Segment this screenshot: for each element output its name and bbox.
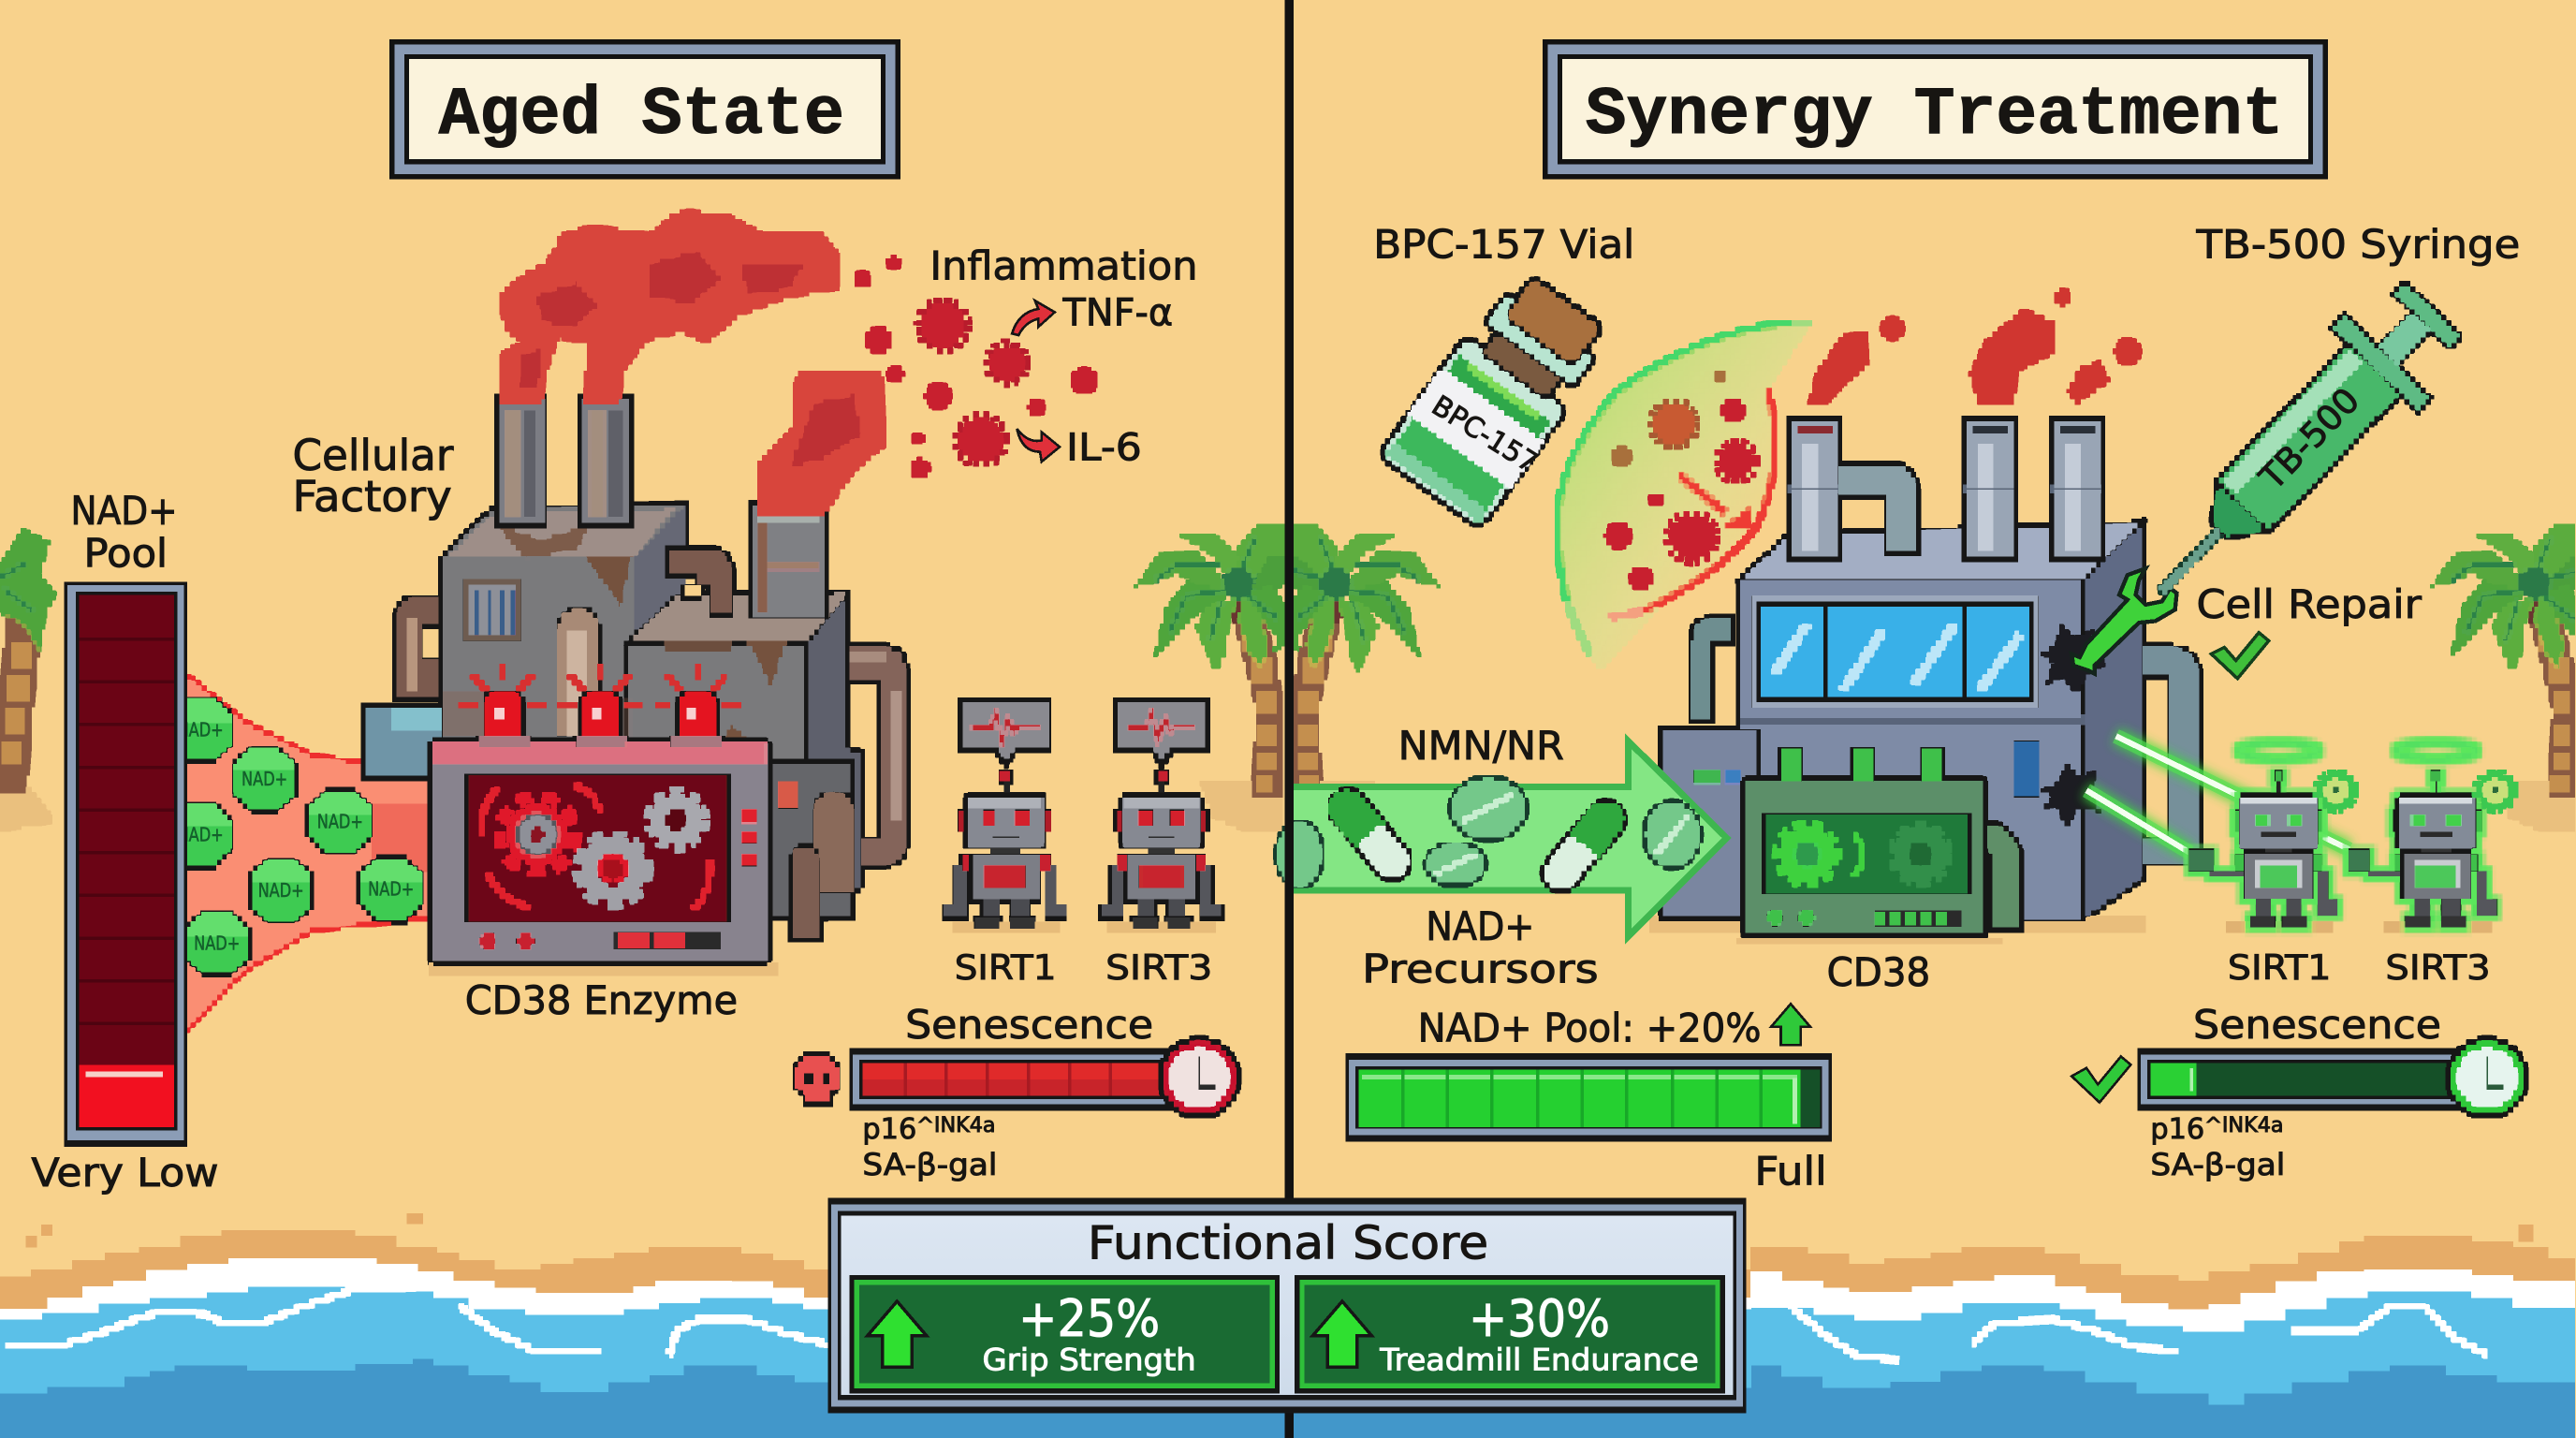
label: Cellular Factory [292, 431, 454, 521]
label: NAD+ Pool: Pool [84, 530, 168, 576]
label: Cellular Factory: Cellular [292, 431, 454, 480]
syringe: TB-500: TB-500 [2251, 380, 2367, 498]
label: Cell Repair: Cell Repair [2197, 581, 2422, 627]
factory chimneys and pipes [1789, 419, 2101, 559]
label: Senescence: Senescence [905, 1002, 1153, 1048]
label: Cellular Factory: Factory [292, 472, 452, 521]
icon: repair check mark [2211, 633, 2269, 679]
panel: aged state [31, 211, 1240, 1196]
label: NAD+ Pool +20%: NAD+ Pool: +20% [1418, 1005, 1761, 1051]
icon: green wrench [2071, 568, 2176, 674]
label: SIRT1: SIRT1 [2228, 947, 2331, 988]
label: NMN/NR: NMN/NR [1398, 723, 1564, 769]
palm tree: far left [0, 529, 56, 831]
markers: p16 and SA-beta-gal [2150, 1113, 2285, 1182]
senescence gauge: low [2137, 1049, 2466, 1110]
card: treadmill endurance [1295, 1275, 1725, 1393]
label: Senescence: Senescence [2193, 1002, 2441, 1048]
SIRT1 robot with weak signal [944, 701, 1066, 933]
icon: up arrow [1771, 1004, 1810, 1045]
icon: clock red [1158, 1036, 1240, 1119]
cytokine particles [855, 257, 1097, 478]
tablets and capsules [1277, 777, 1701, 898]
NAD+ funnel with molecules: NAD+ [242, 768, 287, 790]
arrow to TNF-alpha [1012, 301, 1055, 335]
icon: skull [795, 1055, 840, 1104]
label: NAD+ Precursors: NAD+ [1426, 903, 1534, 949]
arrow to IL-6 [1017, 429, 1060, 462]
palm tree: right panel left [1253, 526, 1439, 829]
label: SIRT3: SIRT3 [1105, 947, 1212, 988]
gears [481, 785, 710, 909]
markers: p16 and SA-beta-gal [862, 1113, 997, 1182]
label: NAD+ Precursors [1362, 903, 1599, 992]
NAD+ pool gauge: very low [65, 581, 187, 1147]
label: TNF-alpha: TNF-α [1062, 290, 1173, 334]
restored factory building [1651, 522, 2200, 933]
markers: p16 and SA-beta-gal: SA-β-gal [2150, 1149, 2285, 1182]
syringe: TB-500 [2116, 267, 2477, 634]
label: NAD+ Pool: NAD+ [71, 488, 178, 534]
label: SIRT3: SIRT3 [2385, 947, 2491, 988]
label: Full: Full [1754, 1148, 1827, 1194]
green repair beams [2086, 736, 2349, 853]
palm tree: left panel right [1135, 526, 1321, 829]
label: TB-500 Syringe: TB-500 Syringe [2195, 222, 2520, 268]
label: Inflammation: Inflammation [929, 242, 1197, 288]
green protective shield [1558, 324, 1810, 670]
NAD+ funnel with molecules: NAD+ [317, 811, 363, 833]
label: NAD+ Precursors: Precursors [1362, 946, 1599, 992]
title: Aged State [389, 39, 900, 179]
red inflammatory smoke [501, 211, 886, 514]
label: Very Low: Very Low [31, 1150, 218, 1196]
markers: p16 and SA-beta-gal: SA-β-gal [862, 1149, 997, 1182]
chimneys [496, 398, 825, 618]
neutralised cytokines [1605, 372, 1756, 590]
title: Aged State: Aged State [439, 77, 844, 154]
vial: BPC-157 [1379, 265, 1618, 529]
markers: p16 and SA-beta-gal: p16 [862, 1113, 916, 1146]
beach and ocean waves [0, 1214, 2576, 1438]
label: SIRT1: SIRT1 [955, 947, 1057, 988]
reduced smoke puffs [1808, 289, 2141, 404]
palm tree: far right [2431, 526, 2576, 829]
NAD+ funnel with molecules: NAD+ [258, 879, 304, 902]
card: grip strength: +25% [1018, 1289, 1160, 1348]
damage marks [2042, 624, 2106, 829]
NAD+ pool gauge: full [1345, 1053, 1832, 1142]
heading: Functional Score [1088, 1215, 1488, 1269]
card: treadmill endurance: +30% [1469, 1289, 1610, 1348]
card: treadmill endurance: Treadmill Endurance [1379, 1343, 1699, 1378]
card: grip strength: Grip Strength [983, 1343, 1196, 1378]
NAD+ funnel with molecules: NAD+ [368, 877, 414, 900]
alarm lights [460, 666, 739, 748]
label: IL-6: IL-6 [1066, 425, 1142, 469]
icon: clock green [2446, 1036, 2528, 1119]
NAD+ funnel with molecules: NAD+ [194, 932, 240, 954]
SIRT1 robot: activated [2190, 742, 2356, 933]
NAD+ precursor arrow [1277, 741, 1727, 936]
CD38 machine: inhibited [1738, 749, 2021, 945]
markers: p16 and SA-beta-gal: p16 [2150, 1113, 2204, 1146]
NAD+ funnel with molecules: NAD+ [178, 718, 224, 741]
NAD+ funnel with molecules: NAD+ [178, 824, 224, 846]
vial: BPC-157: BPC-157 [1426, 389, 1544, 480]
panel: synergy treatment [1277, 222, 2528, 1194]
rusted factory building [365, 505, 907, 938]
icon: check mark [2071, 1056, 2130, 1103]
SIRT3 robot: activated [2348, 742, 2515, 933]
label: CD38 Enzyme: CD38 Enzyme [465, 977, 738, 1023]
label: CD38: CD38 [1827, 949, 1930, 995]
CD38 enzyme machine [431, 666, 779, 975]
card: grip strength [849, 1275, 1280, 1393]
senescence gauge: high [849, 1049, 1178, 1110]
title: Synergy Treatment [1543, 39, 2328, 179]
panel: functional score [828, 1197, 1747, 1413]
vertical divider [1284, 0, 1294, 1438]
NAD+ funnel with molecules [166, 670, 435, 1032]
title: Synergy Treatment: Synergy Treatment [1586, 77, 2284, 154]
markers: p16 and SA-beta-gal: ^INK4a [916, 1114, 996, 1137]
label: BPC-157 Vial: BPC-157 Vial [1373, 222, 1634, 268]
markers: p16 and SA-beta-gal: ^INK4a [2204, 1114, 2284, 1137]
SIRT3 robot with weak signal [1101, 701, 1222, 933]
label: NAD+ Pool [71, 488, 178, 576]
